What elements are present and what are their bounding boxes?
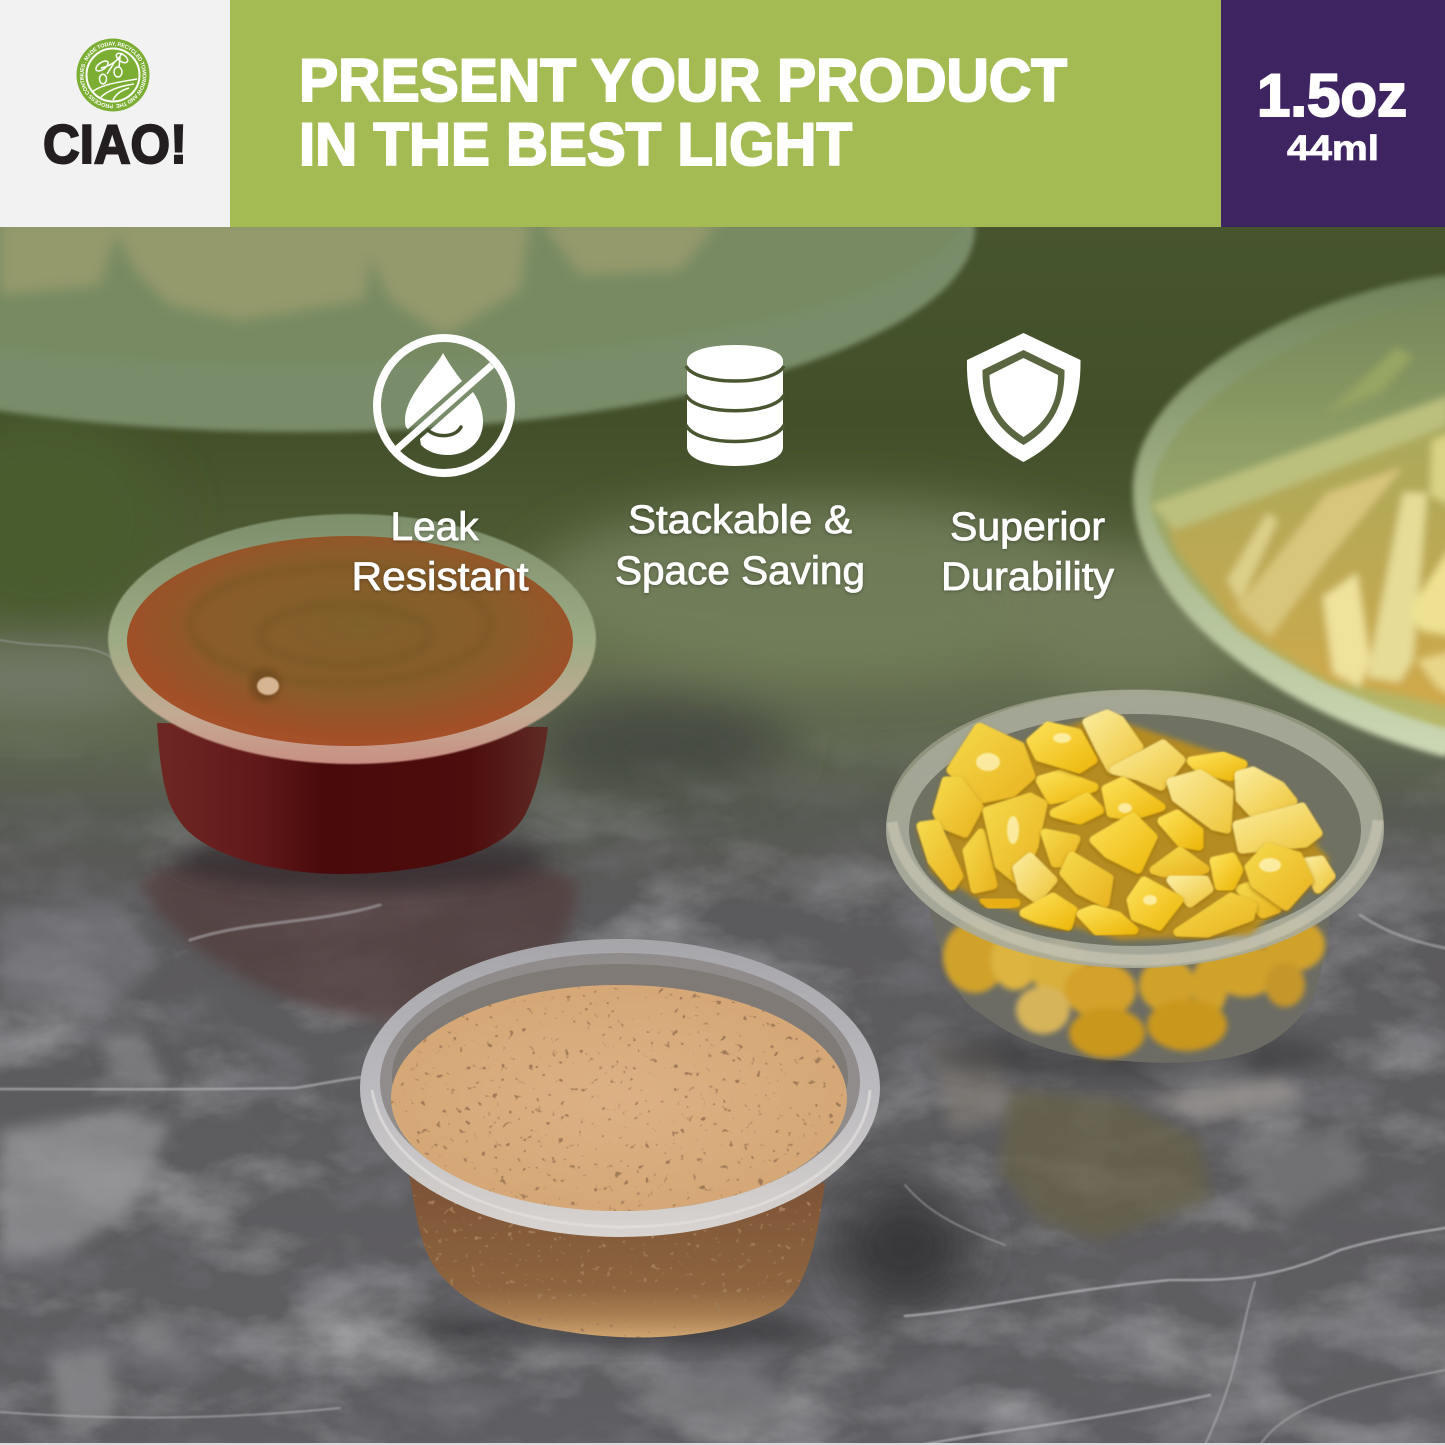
cup: tan sauce bbox=[360, 939, 880, 1350]
label: Stackable & bbox=[628, 498, 852, 542]
feature: stackable bbox=[615, 345, 865, 593]
marble patches bbox=[0, 850, 1370, 1430]
label: Resistant bbox=[352, 555, 529, 599]
cup rim bbox=[892, 820, 1378, 960]
panel: logo bbox=[0, 0, 230, 227]
label: Leak bbox=[391, 505, 479, 549]
corn highlights bbox=[976, 733, 1281, 905]
marble veins bbox=[0, 640, 1445, 1445]
panel: headline banner bbox=[230, 0, 1221, 227]
size label: 44ml bbox=[1287, 129, 1379, 168]
heading: PRESENT YOUR PRODUCT bbox=[299, 47, 1067, 114]
blurred plate with fries, right bbox=[1133, 275, 1445, 757]
icon: shield bbox=[967, 333, 1081, 462]
corn kernels bbox=[921, 714, 1331, 933]
feature: leak resistant bbox=[352, 338, 529, 599]
size label: 1.5oz bbox=[1257, 62, 1407, 129]
icon: no drip bbox=[377, 338, 511, 473]
cup: corn bbox=[886, 690, 1384, 1077]
icon: stacked cups bbox=[686, 345, 784, 466]
panel: size bbox=[1221, 0, 1445, 227]
label: Superior bbox=[950, 505, 1105, 549]
label: Space Saving bbox=[615, 549, 865, 593]
corn seen through the cup wall bbox=[943, 919, 1325, 1058]
cup: tomato sauce bbox=[108, 514, 596, 892]
heading: IN THE BEST LIGHT bbox=[299, 111, 852, 178]
blurred plate, top bbox=[0, 227, 978, 436]
feature: durability bbox=[941, 333, 1116, 599]
marble texture bbox=[0, 782, 1445, 1443]
label: Durability bbox=[941, 555, 1114, 599]
blurred food on top plate bbox=[0, 220, 720, 335]
logo wordmark: CIAO! bbox=[43, 113, 187, 175]
icon: recycling olive badge: PROCESS CONTINUES . MADE TODAY, RECYCLED TOMORROW AND THE bbox=[80, 42, 146, 108]
